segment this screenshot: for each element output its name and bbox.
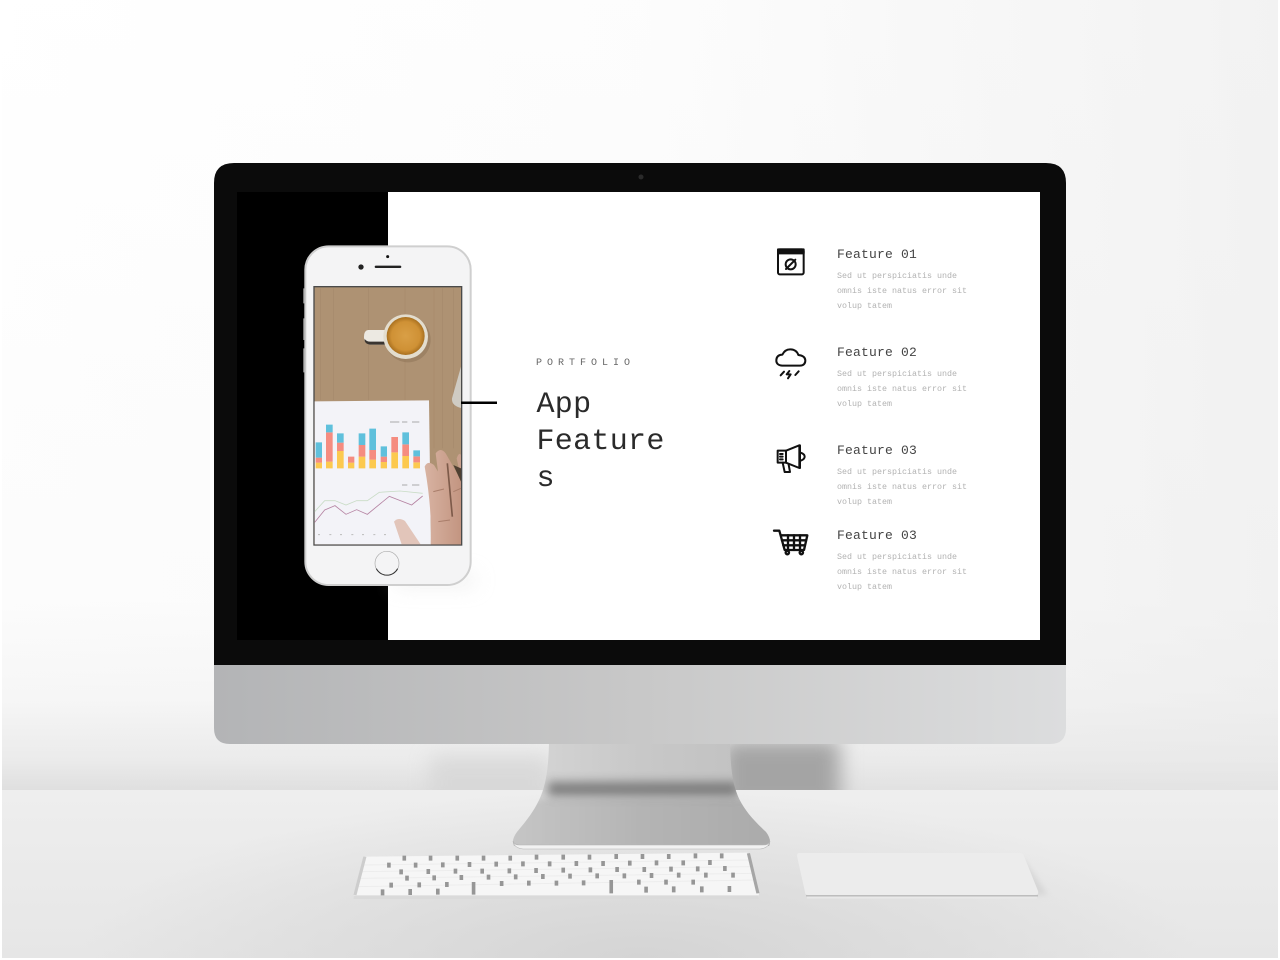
monitor bezel: [214, 163, 1066, 665]
portfolio label: PORTFOLIO: [536, 358, 635, 369]
feature 1: [778, 247, 967, 311]
webcam: [638, 174, 644, 180]
feature 3 text: Feature 03: [837, 443, 917, 458]
monitor stand: [505, 743, 780, 850]
monitor shadow on wall: [432, 744, 852, 790]
phone home button: [375, 551, 399, 575]
paper sheet: [315, 400, 431, 544]
feature 1 text: [837, 247, 967, 311]
feature 4 text: volup tatem: [837, 582, 892, 592]
feature 4 text: Sed ut perspiciatis unde: [837, 552, 957, 562]
phone shadow: [395, 574, 475, 586]
feature 3 text: volup tatem: [837, 497, 892, 507]
feature 1 text: omnis iste natus error sit: [837, 286, 967, 296]
heading: App: [536, 388, 591, 422]
slide screen: [237, 192, 1040, 640]
hand: [394, 450, 461, 544]
feature 3 text: [837, 443, 967, 507]
feature 4 text: [837, 528, 967, 592]
phone body: [305, 246, 471, 585]
keyboard: [354, 853, 759, 899]
feature 4: [774, 528, 967, 592]
icon: storm cloud: [776, 349, 805, 378]
feature 4 text: omnis iste natus error sit: [837, 567, 967, 577]
feature 2 text: Feature 02: [837, 345, 917, 360]
feature 3 text: Sed ut perspiciatis unde: [837, 467, 957, 477]
slide black panel: [237, 192, 388, 640]
feature 2 text: Sed ut perspiciatis unde: [837, 369, 957, 379]
connector line: [461, 402, 497, 404]
line chart on paper: [315, 485, 423, 535]
heading: Feature: [536, 425, 665, 459]
desk surface: [0, 790, 1280, 960]
icon: browser window: [778, 249, 804, 274]
phone photo: [314, 287, 462, 545]
icon: shopping cart: [774, 531, 807, 554]
phone sensor and speaker: [358, 255, 401, 270]
monitor body: [214, 163, 1066, 744]
tablet corner: [452, 367, 461, 408]
feature 3 text: omnis iste natus error sit: [837, 482, 967, 492]
coffee cup: [364, 314, 431, 362]
feature 1 text: volup tatem: [837, 301, 892, 311]
feature 2 text: volup tatem: [837, 399, 892, 409]
slide white panel: [388, 192, 1040, 640]
feature 2 text: [837, 345, 967, 409]
phone side buttons: [301, 288, 307, 372]
feature 2 text: omnis iste natus error sit: [837, 384, 967, 394]
feature 4 text: Feature 03: [837, 528, 917, 543]
feature 3: [778, 443, 967, 507]
trackpad: [797, 853, 1048, 898]
icon: megaphone: [778, 445, 805, 472]
heading: s: [536, 462, 555, 496]
phone mockup with photo: [304, 246, 475, 586]
feature 2: [776, 345, 967, 409]
feature 1 text: Sed ut perspiciatis unde: [837, 271, 957, 281]
heading: [536, 388, 665, 496]
feature 1 text: Feature 01: [837, 247, 917, 262]
monitor chin: [214, 665, 1066, 744]
bar chart on paper: [316, 422, 420, 468]
